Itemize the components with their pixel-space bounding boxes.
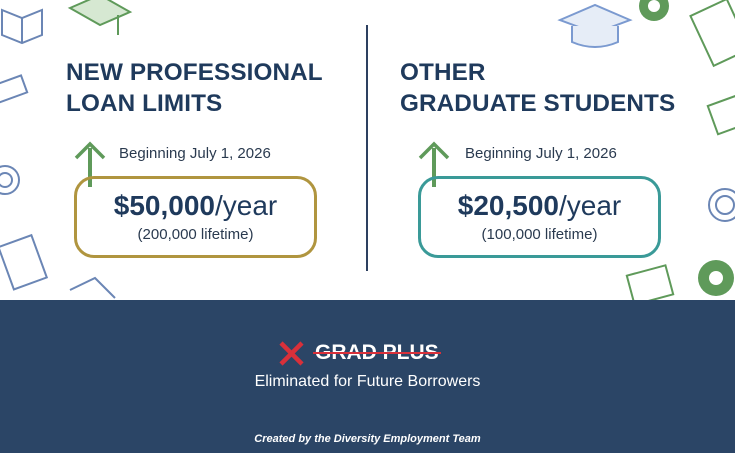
- credit: Created by the Diversity Employment Team: [254, 433, 481, 445]
- icon: red x: [280, 341, 304, 366]
- icon: arrow left: [74, 142, 106, 187]
- title: left: NEW PROFESSIONAL: [66, 59, 323, 86]
- divider: [366, 25, 368, 271]
- box right: [418, 176, 661, 258]
- title: right: OTHER: [400, 59, 486, 86]
- title: right: GRADUATE STUDENTS: [400, 90, 675, 117]
- title: right: [400, 59, 675, 117]
- box left: [74, 176, 317, 258]
- date left: Beginning July 1, 2026: [119, 145, 271, 162]
- decorative icons: [0, 0, 735, 300]
- box right: $20,500/year: [458, 190, 621, 221]
- title: left: LOAN LIMITS: [66, 90, 222, 117]
- bottom panel: [0, 300, 735, 453]
- box right: (100,000 lifetime): [482, 226, 597, 243]
- icon: arrow right: [418, 142, 450, 187]
- box left: $50,000/year: [114, 190, 277, 221]
- title: left: [66, 59, 323, 117]
- date right: Beginning July 1, 2026: [465, 145, 617, 162]
- grad plus: GRAD PLUS: [315, 341, 439, 364]
- box left: (200,000 lifetime): [138, 226, 253, 243]
- subtitle: Eliminated for Future Borrowers: [255, 373, 480, 390]
